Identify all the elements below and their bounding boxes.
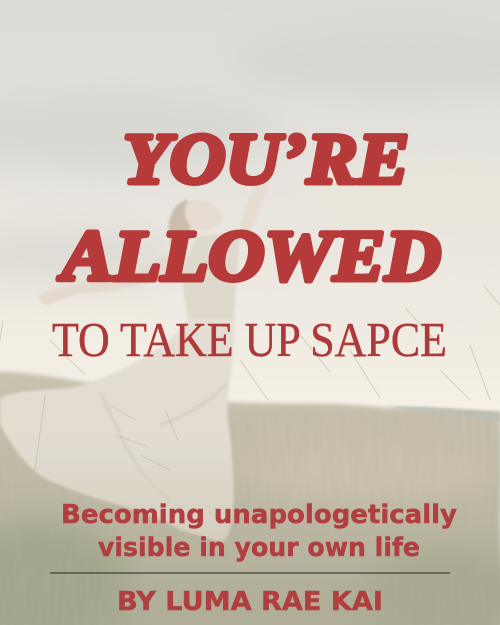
subtitle: to take up sapce: TO TAKE UP SAPCE [52,312,447,367]
tagline [61,500,457,563]
title: YOU'RE: YOU’RE [123,119,409,199]
hair [169,200,196,256]
author byline: BY LUMA RAE KAI [117,587,383,617]
title: ALLOWED: ALLOWED [58,216,441,296]
left arm [38,252,180,305]
raised arm [240,176,271,238]
woman in white dress [0,176,271,542]
head [185,200,222,230]
tagline: visible in your own life [98,533,420,563]
skirt [0,318,234,542]
grass stems against sky [0,286,500,400]
background: sky [0,0,500,425]
tagline: Becoming unapologetically [61,500,457,530]
background: meadow [0,372,500,625]
torso [183,232,240,320]
